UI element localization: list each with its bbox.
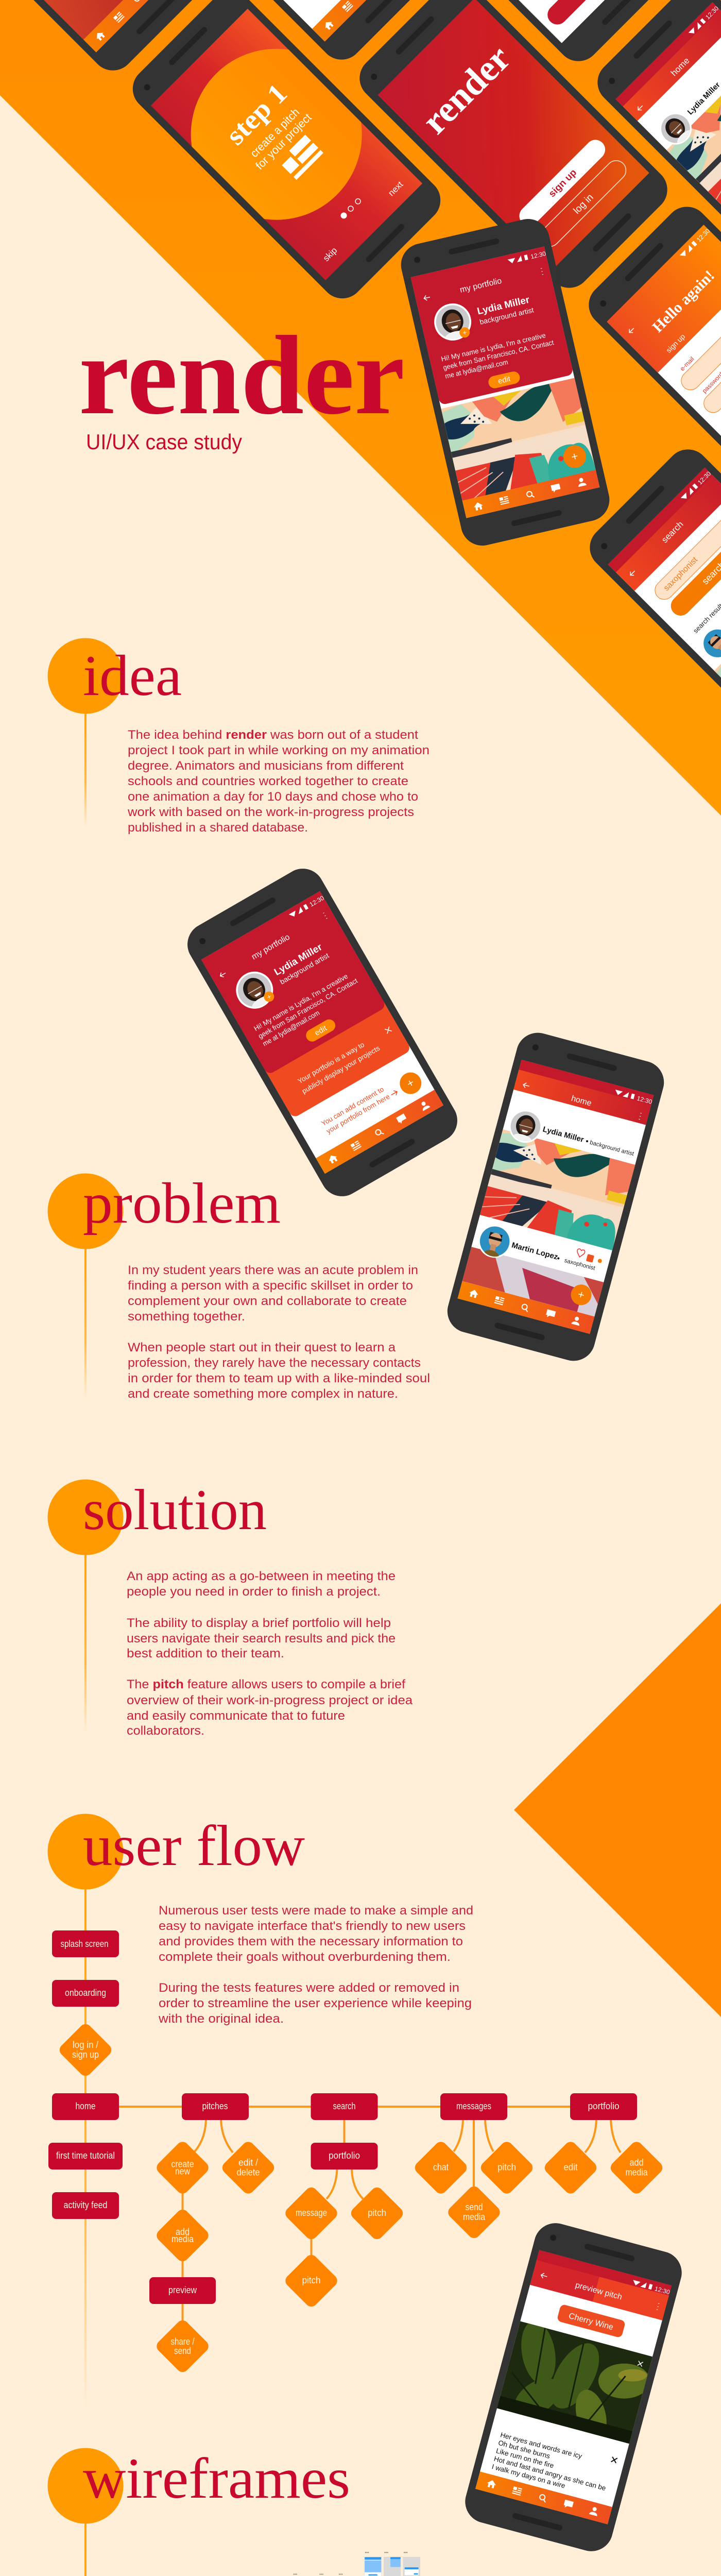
text: problem body: in order for them to team up with a like-minded soul — [128, 1371, 430, 1385]
text: problem body: When people start out in their quest to learn a — [128, 1341, 396, 1354]
phone: home feed right edge — [597, 0, 721, 215]
text: solution body: people you need in order to finish a project. — [127, 1585, 381, 1599]
section: idea — [47, 638, 430, 835]
phone: search: 12:30 — [696, 470, 712, 486]
flow: add media portfolio: media — [625, 2167, 648, 2177]
phone: portfolio with tutorial overlay: me at lydia@mail.com — [261, 1009, 321, 1048]
flow: activity feed — [52, 2192, 119, 2219]
phone: preview pitch: Cherry Wine — [568, 2312, 614, 2332]
section: user flow — [47, 1814, 473, 2410]
phone: portfolio with tutorial overlay: You can add content to — [320, 1086, 385, 1127]
heading: idea: idea — [83, 644, 182, 708]
flow: chat: chat — [433, 2162, 449, 2172]
phone: my portfolio front: my portfolio — [459, 277, 503, 295]
flow: log in / sign up: log in / — [73, 2040, 98, 2050]
phone: my portfolio front: Lydia Miller — [476, 294, 531, 317]
flow: message: message — [296, 2208, 327, 2218]
phone: portfolio with tutorial overlay: Your portfolio is a way to — [297, 1041, 366, 1085]
subtitle: UI/UX case study — [86, 430, 242, 454]
phone: portfolio with tutorial overlay: 12:30 — [308, 894, 325, 908]
phone: home feed — [442, 1028, 669, 1366]
phone: my portfolio front: + — [570, 449, 579, 463]
text: problem body: In my student years there was an acute problem in — [128, 1263, 418, 1277]
flow: share / send — [154, 2318, 211, 2375]
flow: preview — [149, 2277, 216, 2304]
phone: splash screen render — [351, 0, 676, 297]
heading: user flow: user flow — [83, 1814, 305, 1878]
phone: hello again sign up: e-mail — [679, 355, 696, 372]
phone: splash screen render: sign up — [547, 167, 579, 199]
diagonal orange hero band — [0, 0, 721, 816]
text: user flow body: During the tests features were added or removed in — [159, 1981, 459, 1995]
phone: portfolio with tutorial overlay: + — [404, 1076, 417, 1090]
phone: my portfolio front — [397, 215, 614, 550]
phone: portfolio with tutorial overlay: Hi! My name is Lydia, I'm a creative — [252, 972, 349, 1032]
text: solution body: An app acting as a go-between in meeting the — [127, 1569, 396, 1583]
flow: portfolio — [570, 2093, 637, 2120]
phone: home feed: Martin Lopez — [510, 1241, 559, 1262]
flow: pitch lower: pitch — [302, 2275, 320, 2285]
phone: portfolio with tutorial overlay: geek from San Francisco, CA. Contact — [257, 977, 359, 1040]
timeline and circle — [47, 1174, 124, 1400]
flow: home: home — [75, 2101, 96, 2111]
text: solution body: best addition to their team. — [127, 1647, 284, 1660]
text: problem body: profession, they rarely have the necessary contacts — [128, 1356, 421, 1370]
wireframe screens grid — [150, 2552, 601, 2576]
phone: onboarding step 1 — [133, 0, 441, 299]
flow: preview: preview — [168, 2285, 197, 2295]
flow: edit / delete: delete — [237, 2167, 260, 2177]
phone: my portfolio front: geek from San Francisco, CA. Contact — [442, 338, 555, 371]
text: idea body: project I took part in while working on my animation — [128, 743, 430, 757]
phone: portfolio with tutorial overlay: my portfolio — [250, 933, 291, 961]
phone: portfolio with tutorial overlay: your portfolio from here — [325, 1093, 391, 1135]
title: render: render — [79, 313, 405, 438]
text: solution body: collaborators. — [127, 1724, 204, 1738]
flow: splash screen — [52, 1930, 119, 1957]
phone: portfolio with tutorial overlay: edit — [313, 1024, 329, 1038]
phone: home feed: saxophonist — [563, 1258, 596, 1272]
phone: splash screen render: log in — [572, 192, 596, 216]
flow: search portfolio — [311, 2143, 378, 2170]
flow: edit / delete: edit / — [238, 2158, 258, 2168]
phone: portfolio with tutorial overlay: background artist — [278, 951, 331, 986]
flow: search: search — [333, 2101, 355, 2111]
flow: chat — [413, 2139, 469, 2196]
flow: home — [52, 2093, 119, 2120]
phone: preview pitch: Like rum on the fire — [495, 2447, 555, 2470]
flow: onboarding: onboarding — [65, 1988, 106, 1998]
text: solution body: The pitch feature allows users to compile a brief — [127, 1677, 405, 1691]
flow: pitch: pitch — [368, 2208, 386, 2218]
text: problem body: something together. — [128, 1310, 245, 1324]
flow: share / send: share / — [171, 2336, 195, 2347]
heading: problem: problem — [83, 1172, 281, 1235]
flow: pitch — [349, 2185, 405, 2242]
phone: splash screen render: render — [414, 37, 519, 142]
flow: add media portfolio — [608, 2139, 665, 2196]
flow: pitch messages — [478, 2139, 535, 2196]
flow: portfolio: portfolio — [588, 2101, 619, 2111]
phone: my portfolio front: 12:30 — [530, 250, 547, 260]
flow connectors — [118, 2107, 621, 2346]
flow: splash screen: splash screen — [61, 1939, 108, 1949]
phone: preview pitch: Hot and fast and angry as she can be — [493, 2455, 607, 2492]
timeline and circle — [47, 1814, 124, 2410]
phone: preview pitch: Oh but she burns — [497, 2439, 551, 2460]
flow: add media portfolio: add — [629, 2158, 644, 2168]
text: user flow body: Numerous user tests were made to make a simple and — [159, 1904, 473, 1918]
timeline and circle — [47, 1480, 124, 1734]
heading: wireframes: wireframes — [83, 2447, 350, 2511]
text: user flow body: complete their goals without overburdening them. — [159, 1950, 451, 1964]
flow: search portfolio: portfolio — [329, 2150, 360, 2161]
text: solution body: and easily communicate that to future — [127, 1709, 345, 1723]
phone: home feed right edge: home — [669, 56, 692, 78]
section: problem — [47, 1172, 430, 1401]
flow: send media — [445, 2184, 503, 2241]
phone: my portfolio front: + — [461, 328, 468, 337]
text: problem body: and create something more complex in nature. — [128, 1387, 398, 1401]
phone: portfolio with tutorial overlay: publicly display your projects — [301, 1044, 381, 1095]
text: idea body: degree. Animators and musicians from different — [128, 759, 404, 773]
flow: add media: add — [176, 2227, 190, 2237]
text: idea body: schools and countries worked together to create — [128, 774, 408, 788]
phone: home feed right edge: Lydia Miller — [686, 80, 721, 116]
phone: preview pitch: I walk my days on a wire — [491, 2463, 566, 2490]
flow: first time tutorial: first time tutorial — [56, 2150, 115, 2161]
flow: pitches — [182, 2093, 249, 2120]
timeline and circle — [47, 2448, 124, 2576]
flow: log in / sign up — [57, 2022, 114, 2078]
phone: hello again sign up: sign up — [664, 332, 686, 354]
flow: add media — [154, 2207, 211, 2264]
phone: my portfolio front: edit — [497, 375, 512, 386]
phone: onboarding step 1: next — [386, 179, 405, 198]
flow: share / send: send — [174, 2346, 191, 2356]
text: idea body: published in a shared database. — [128, 821, 308, 835]
phone: top-left cropped — [33, 0, 192, 71]
flow: create new: new — [175, 2166, 191, 2176]
phone: portfolio with tutorial overlay: Lydia Miller — [272, 942, 324, 978]
flow: pitch lower — [283, 2252, 340, 2309]
flow: edit: edit — [563, 2162, 578, 2172]
phone: preview pitch: Her eyes and words are icy — [500, 2431, 583, 2460]
phone: search: saxophonist — [662, 555, 699, 592]
text: problem body — [128, 1263, 430, 1401]
flow: messages — [440, 2093, 507, 2120]
phone: home feed: + — [576, 1287, 586, 1302]
flow: create new — [154, 2139, 211, 2196]
flow: log in / sign up: sign up — [72, 2049, 99, 2060]
timeline and circle — [47, 638, 124, 827]
phone: onboarding step 1: skip — [321, 245, 339, 263]
flow: onboarding — [52, 1980, 119, 2007]
phone: onboarding step 1: for your project — [253, 111, 314, 172]
text: problem body: complement your own and collaborate to create — [128, 1294, 407, 1308]
phone: home feed: 12:30 — [636, 1095, 653, 1106]
flow: messages: messages — [456, 2101, 491, 2111]
flow: create new: create — [171, 2159, 194, 2169]
phone: hello again sign up: 12:30 — [695, 227, 711, 243]
phone: portfolio with tutorial overlay: + — [265, 992, 273, 1001]
phone: top-middle cropped — [273, 0, 410, 60]
flow: first time tutorial — [48, 2143, 123, 2170]
text: solution body — [127, 1569, 413, 1738]
phone: onboarding step 1: step 1 — [220, 78, 293, 151]
phone: my portfolio front: background artist — [479, 306, 535, 326]
phone: preview pitch — [460, 2218, 688, 2556]
text: idea body: work with based on the work-in-progress projects — [127, 805, 414, 819]
flow: pitch messages: pitch — [497, 2162, 516, 2172]
text: user flow body: order to streamline the user experience while keeping — [159, 1996, 472, 2010]
decorative orange triangle — [514, 1603, 721, 2017]
phone: search: search — [660, 519, 685, 545]
phone: home feed: background artist — [589, 1140, 635, 1157]
text: solution body: users navigate their search results and pick the — [127, 1632, 396, 1646]
flow: search — [311, 2093, 378, 2120]
section: wireframes — [47, 2447, 350, 2576]
section: solution — [47, 1478, 413, 1738]
text: user flow body — [158, 1904, 473, 2026]
phone: home feed right edge: 12:30 — [704, 5, 720, 21]
flow: add media: media — [171, 2234, 194, 2244]
phone: my portfolio front: me at lydia@mail.com — [444, 358, 509, 380]
text: idea body: one animation a day for 10 days and chose who to — [128, 790, 418, 804]
text: user flow body: with the original idea. — [158, 2012, 284, 2026]
flow: send media: media — [463, 2212, 486, 2222]
flow: edit / delete — [220, 2139, 277, 2196]
text: idea body — [127, 728, 430, 835]
heading: solution: solution — [83, 1478, 267, 1542]
phone: home feed: home — [570, 1094, 592, 1108]
text: solution body: The ability to display a brief portfolio will help — [127, 1616, 391, 1630]
text: user flow body: and provides them with the necessary information to — [159, 1935, 463, 1948]
flow: pitches: pitches — [202, 2101, 228, 2111]
flow: message — [283, 2185, 340, 2242]
phone: search — [590, 449, 721, 688]
phone: onboarding step 1: create a pitch — [248, 106, 302, 160]
flow: edit — [542, 2139, 599, 2196]
text: problem body: finding a person with a specific skillset in order to — [128, 1279, 413, 1293]
phone: hello again sign up: Hello again! — [649, 267, 718, 336]
phone: portfolio with tutorial overlay — [180, 861, 465, 1204]
flow: activity feed: activity feed — [64, 2200, 107, 2210]
phone: preview pitch: preview pitch — [574, 2281, 623, 2302]
flow: send media: send — [466, 2202, 483, 2212]
text: user flow body: easy to navigate interface that's friendly to new users — [159, 1919, 466, 1933]
phone: hello again sign up — [589, 207, 721, 446]
phone: top-right cropped with red pill — [508, 0, 648, 61]
phone: home feed: Lydia Miller — [542, 1125, 585, 1144]
phone: my portfolio front: Hi! My name is Lydia, I'm a creative — [440, 331, 546, 363]
text: idea body: The idea behind render was born out of a student — [128, 728, 418, 742]
phone: preview pitch: 12:30 — [654, 2285, 671, 2296]
text: solution body: overview of their work-in-progress project or idea — [127, 1693, 413, 1707]
